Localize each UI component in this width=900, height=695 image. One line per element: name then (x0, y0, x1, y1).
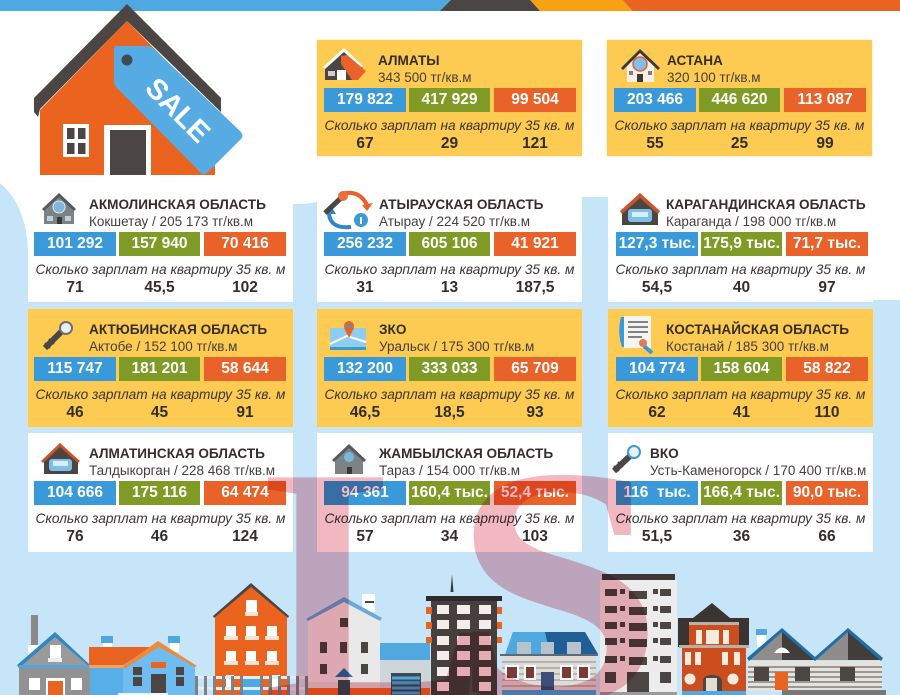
panel: East Kazakhstan region: 90,0 тыс. (793, 484, 861, 501)
panel: Atyrau region: 13 (441, 279, 458, 296)
panel: Karaganda region: Сколько зарплат на квартиру 35 кв. м (616, 262, 865, 277)
panel: Atyrau region: АТЫРАУСКАЯ ОБЛАСТЬ (379, 197, 543, 212)
panel: Aktobe region: Актобе / 152 100 тг/кв.м (89, 339, 237, 354)
panel: Atyrau region (317, 187, 582, 302)
panel: Almaty region: 124 (232, 528, 258, 545)
panel: West Kazakhstan region (317, 309, 582, 427)
panel: Akmola region: 71 (66, 279, 84, 296)
garage: blue (380, 643, 430, 695)
panel: Almaty region: 76 (66, 528, 84, 545)
fence (195, 676, 315, 695)
panel: Almaty region: 175 116 (132, 484, 187, 501)
icon: keys with arrows (323, 190, 373, 230)
panel: Almaty: 99 504 (511, 91, 559, 108)
panel: Atyrau region: 256 232 (337, 235, 393, 252)
house: grey double gable (747, 628, 886, 695)
panel: Karaganda region (608, 187, 873, 302)
panel: Karaganda region: КАРАГАНДИНСКАЯ ОБЛАСТЬ (666, 197, 866, 212)
panel: Almaty region: 64 474 (221, 484, 269, 501)
panel: East Kazakhstan region (608, 433, 873, 552)
panel: Karaganda region: 175,9 тыс. (703, 235, 780, 252)
panel: West Kazakhstan region: 132 200 (337, 360, 393, 377)
panel: East Kazakhstan region: 36 (733, 528, 750, 545)
panel: Kostanay region: Сколько зарплат на квартиру 35 кв. м (616, 387, 865, 402)
panel: East Kazakhstan region: Сколько зарплат на квартиру 35 кв. м (616, 511, 865, 526)
panel: Astana: 25 (731, 135, 748, 152)
icon: key (612, 445, 641, 474)
panel: West Kazakhstan region: 18,5 (434, 404, 465, 421)
panel: Akmola region (28, 187, 293, 302)
panel: Karaganda region: 40 (733, 279, 750, 296)
panel: Karaganda region: 54,5 (642, 279, 672, 296)
panel: Aktobe region: АКТЮБИНСКАЯ ОБЛАСТЬ (89, 322, 267, 337)
panel: Atyrau region: 605 106 (421, 235, 478, 252)
panel: Kostanay region: 41 (733, 404, 750, 421)
panel: Atyrau region: 31 (356, 279, 374, 296)
panel: Kostanay region: Костанай / 185 300 тг/кв.м (666, 339, 829, 354)
panel: Akmola region: 101 292 (47, 235, 103, 252)
panel: Zhambyl region: 103 (522, 528, 548, 545)
panel: Zhambyl region: 94 361 (341, 484, 389, 501)
panel: Almaty region: Талдыкорган / 228 468 тг/кв.м (89, 463, 275, 478)
panel: Kostanay region: 104 774 (629, 360, 685, 377)
panel: East Kazakhstan region: 166,4 тыс. (703, 484, 780, 501)
panel: Almaty: 417 929 (421, 91, 478, 108)
panel: Aktobe region: Сколько зарплат на квартиру 35 кв. м (36, 387, 285, 402)
panel: East Kazakhstan region: 66 (818, 528, 836, 545)
tower: dark apartment block (426, 574, 502, 695)
panel: Kostanay region: 110 (814, 404, 840, 421)
panel: Almaty region (28, 433, 293, 552)
house: orange brick (213, 583, 289, 695)
panel: Aktobe region: 46 (66, 404, 84, 421)
panel: East Kazakhstan region: 116 тыс. (623, 484, 691, 501)
house: white with blue roof (306, 594, 382, 695)
panel: Almaty (317, 40, 582, 156)
panel: Zhambyl region: 52,4 тыс. (501, 484, 569, 501)
panel: Kostanay region: 62 (648, 404, 666, 421)
panel: Atyrau region: Атырау / 224 520 тг/кв.м (379, 214, 530, 229)
panel: West Kazakhstan region: 333 033 (421, 360, 478, 377)
panel: Zhambyl region: 160,4 тыс. (411, 484, 488, 501)
panel: Atyrau region: 41 921 (511, 235, 559, 252)
panel: West Kazakhstan region: 46,5 (350, 404, 380, 421)
panel: Almaty region: 46 (151, 528, 168, 545)
panel: Aktobe region: 45 (151, 404, 168, 421)
panel: Atyrau region: Сколько зарплат на квартиру 35 кв. м (325, 262, 574, 277)
tower: tall white apartments (600, 574, 677, 695)
house: grey cottage (17, 615, 91, 695)
panel: Akmola region: Кокшетау / 205 173 тг/кв.м (89, 214, 253, 229)
panel: Kostanay region: 58 822 (803, 360, 851, 377)
panel: Kostanay region: КОСТАНАЙСКАЯ ОБЛАСТЬ (666, 322, 849, 337)
panel: Karaganda region: 97 (818, 279, 836, 296)
panel: Aktobe region: 58 644 (221, 360, 269, 377)
panel: West Kazakhstan region: 65 709 (511, 360, 559, 377)
icon: grey house with key (332, 444, 366, 474)
panel: West Kazakhstan region: 93 (526, 404, 544, 421)
panel: Akmola region: 70 416 (221, 235, 269, 252)
panel: Astana (607, 40, 872, 156)
house: red brick with dark roof (678, 603, 749, 695)
panel: West Kazakhstan region: ЗКО (379, 322, 406, 337)
panel: Zhambyl region: Тараз / 154 000 тг/кв.м (379, 463, 520, 478)
panel: West Kazakhstan region: Уральск / 175 300 тг/кв.м (379, 339, 534, 354)
panel: Karaganda region: Караганда / 198 000 тг/кв.м (666, 214, 836, 229)
panel: Almaty: 67 (356, 135, 374, 152)
panel: Zhambyl region (317, 433, 582, 552)
panel: Astana: 113 087 (797, 91, 853, 108)
panel: Almaty region: 104 666 (47, 484, 103, 501)
house: blue with orange roof (89, 636, 197, 695)
icon: certificate (619, 316, 654, 354)
icon: house with tag (323, 48, 366, 80)
panel: Astana: 55 (646, 135, 664, 152)
panel: Almaty: Сколько зарплат на квартиру 35 кв. м (325, 118, 574, 133)
panel: Zhambyl region: Сколько зарплат на квартиру 35 кв. м (325, 511, 574, 526)
icon: key (42, 321, 73, 350)
panel: Kostanay region: 158 604 (713, 360, 770, 377)
hero icon: house with sale tag: SALE (139, 72, 216, 149)
panel: Astana: 203 466 (627, 91, 683, 108)
panel: Akmola region: Сколько зарплат на квартиру 35 кв. м (36, 262, 285, 277)
panel: Atyrau region: 187,5 (516, 279, 554, 296)
panel: Zhambyl region: 34 (441, 528, 458, 545)
panel: Zhambyl region: ЖАМБЫЛСКАЯ ОБЛАСТЬ (379, 446, 553, 461)
panel: Almaty: 179 822 (337, 91, 393, 108)
panel: Astana: Сколько зарплат на квартиру 35 кв. м (615, 118, 864, 133)
panel: Almaty: 121 (522, 135, 548, 152)
house: striped with blue mansard roof (500, 632, 598, 695)
icon: garage with car (41, 443, 80, 474)
panel: Karaganda region: 127,3 тыс. (619, 235, 695, 252)
hero icon: house with sale tag (34, 4, 242, 175)
top colour bar (0, 0, 900, 11)
illustration: row of city buildings (17, 574, 886, 695)
panel: East Kazakhstan region: 51,5 (642, 528, 672, 545)
panel: Astana: 320 100 тг/кв.м (667, 70, 761, 85)
panel: Aktobe region (28, 309, 293, 427)
panel: West Kazakhstan region: Сколько зарплат на квартиру 35 кв. м (325, 387, 574, 402)
panel: Almaty: АЛМАТЫ (378, 53, 440, 68)
icon: house with percent (621, 49, 660, 82)
icon: grey house with key (42, 193, 76, 224)
panel: Karaganda region: 71,7 тыс. (793, 235, 861, 252)
icon: map with pin (330, 321, 366, 350)
panel: Almaty: 343 500 тг/кв.м (378, 70, 472, 85)
panel: Zhambyl region: 57 (356, 528, 374, 545)
panel: Akmola region: АКМОЛИНСКАЯ ОБЛАСТЬ (89, 197, 266, 212)
panel: Aktobe region: 115 747 (47, 360, 103, 377)
panel: Astana: АСТАНА (667, 53, 723, 68)
panel: East Kazakhstan region: ВКО (650, 446, 679, 461)
icon: garage with car (620, 193, 660, 225)
panel: Aktobe region: 91 (236, 404, 254, 421)
panel: Akmola region: 45,5 (144, 279, 175, 296)
panel: Astana: 99 (816, 135, 834, 152)
panel: East Kazakhstan region: Усть-Каменогорск / 170 400 тг/кв.м (650, 463, 866, 478)
panel: Almaty: 29 (441, 135, 458, 152)
panel: Akmola region: 157 940 (131, 235, 188, 252)
panel: Almaty region: АЛМАТИНСКАЯ ОБЛАСТЬ (89, 446, 265, 461)
panel: Aktobe region: 181 201 (131, 360, 188, 377)
panel: Akmola region: 102 (232, 279, 258, 296)
panel: Astana: 446 620 (711, 91, 768, 108)
panel: Kostanay region (608, 309, 873, 427)
panel: Almaty region: Сколько зарплат на квартиру 35 кв. м (36, 511, 285, 526)
